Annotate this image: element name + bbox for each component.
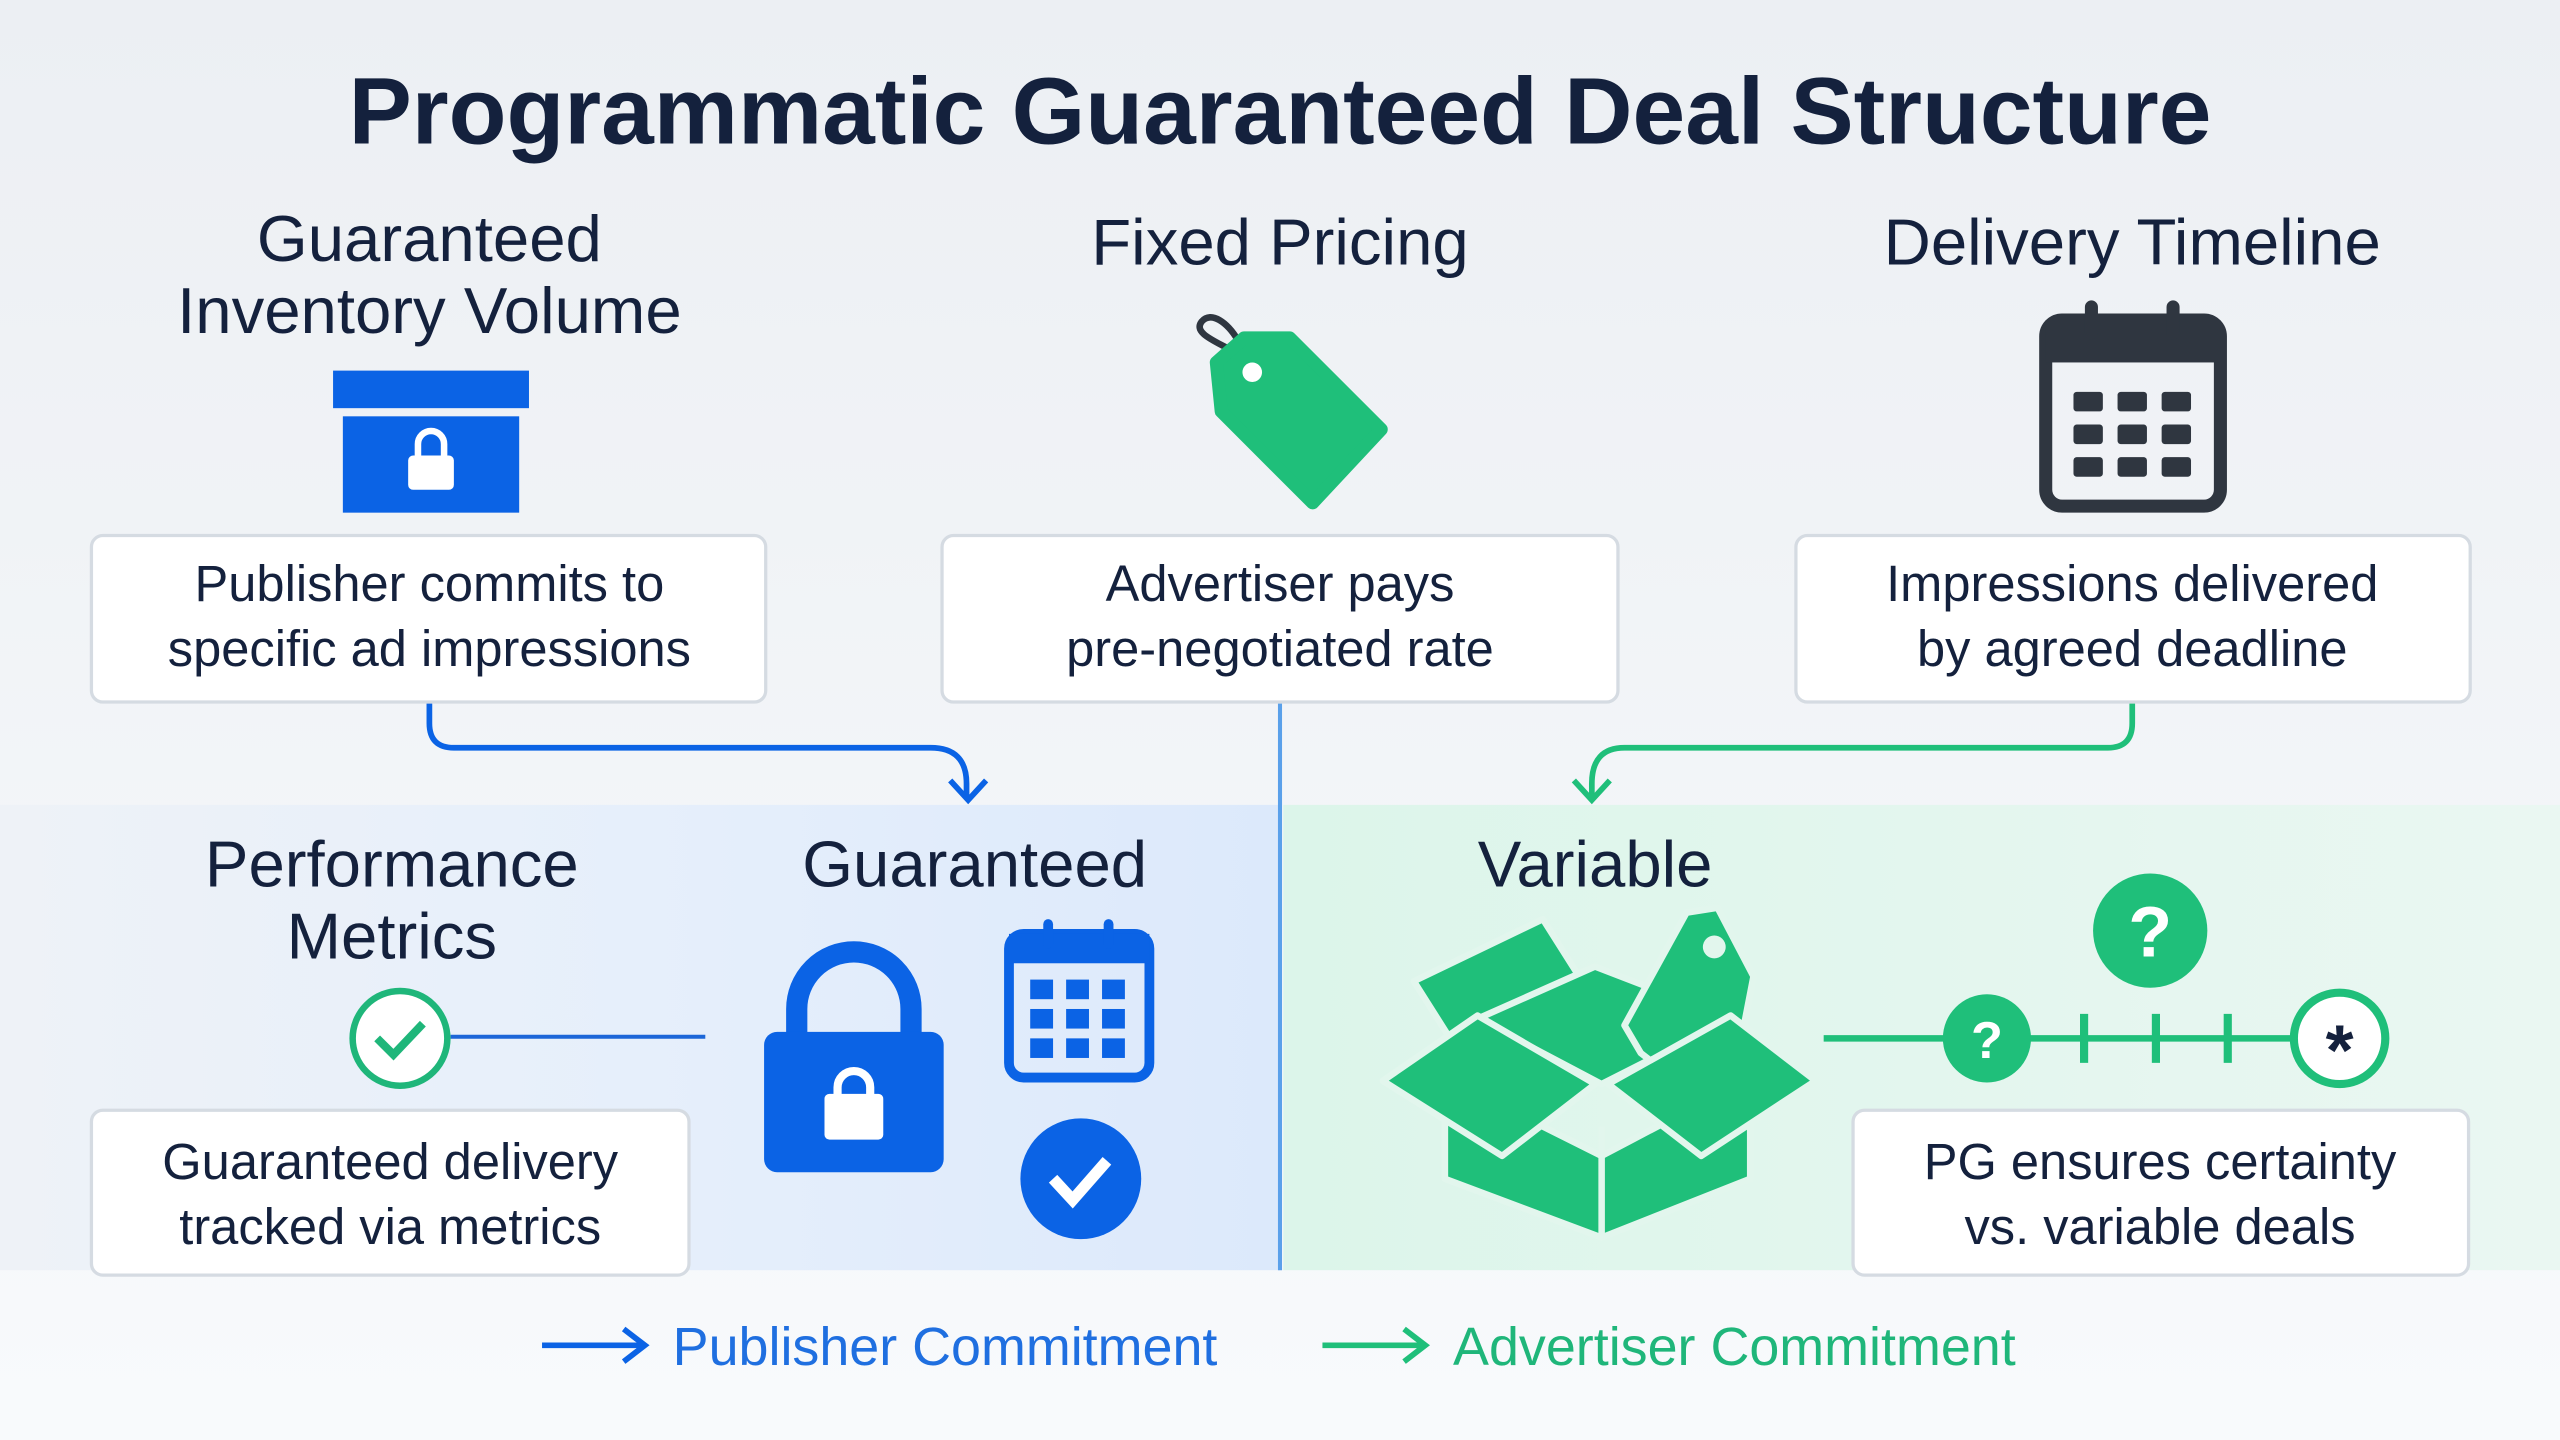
icon: variable timeline: * — [2326, 1010, 2354, 1090]
heading: guaranteed inventory volume: Inventory Volume — [177, 274, 682, 347]
panel: variable background — [1283, 805, 2560, 1270]
icon: blue check circle — [1020, 1118, 1141, 1239]
heading: performance metrics: Performance — [205, 828, 579, 901]
icon: variable timeline: ? — [1971, 1012, 2003, 1070]
icon: variable timeline — [1824, 873, 2385, 1090]
panel: guaranteed background — [0, 805, 1280, 1270]
text box: publisher commits: specific ad impressions — [168, 620, 691, 677]
icon: locked box — [333, 371, 529, 513]
text box: publisher commits: Publisher commits to — [195, 555, 664, 612]
heading: fixed pricing: Fixed Pricing — [1091, 205, 1469, 278]
text box: publisher commits — [91, 536, 766, 702]
text box: impressions delivered — [1796, 536, 2470, 702]
heading: delivery timeline: Delivery Timeline — [1884, 205, 2381, 278]
arrow: advertiser connector — [1574, 704, 2132, 800]
text box: guaranteed delivery — [91, 1110, 689, 1275]
text box: advertiser pays: Advertiser pays — [1106, 555, 1454, 612]
text box: PG ensures certainty: vs. variable deals — [1964, 1198, 2356, 1255]
icon: big padlock — [764, 952, 944, 1172]
text box: PG ensures certainty: PG ensures certainty — [1924, 1133, 2397, 1190]
heading: performance metrics: Metrics — [287, 899, 497, 972]
heading: guaranteed inventory volume: Guaranteed — [257, 202, 602, 275]
icon: check circle metrics — [353, 991, 705, 1086]
text box: guaranteed delivery: Guaranteed delivery — [162, 1133, 619, 1190]
heading: guaranteed: Guaranteed — [802, 828, 1147, 901]
text box: PG ensures certainty — [1853, 1110, 2469, 1275]
text box: advertiser pays — [942, 536, 1618, 702]
text box: guaranteed delivery: tracked via metrics — [179, 1198, 601, 1255]
heading: variable: Variable — [1478, 828, 1712, 901]
text box: impressions delivered: Impressions delivered — [1886, 555, 2378, 612]
icon: calendar dark — [2046, 300, 2220, 506]
divider line center — [1279, 704, 1281, 1270]
icon: blue calendar — [1009, 919, 1149, 1078]
title: Programmatic Guaranteed Deal Structure — [349, 59, 2211, 165]
legend: publisher commitment: Publisher Commitment — [673, 1317, 1217, 1377]
legend: advertiser commitment: Advertiser Commitment — [1453, 1317, 2016, 1377]
icon: price tag — [1200, 317, 1381, 503]
text box: advertiser pays: pre-negotiated rate — [1066, 620, 1494, 677]
text box: impressions delivered: by agreed deadline — [1917, 620, 2348, 677]
arrow: publisher connector — [429, 704, 986, 800]
icon: open box with tag — [1383, 908, 1816, 1238]
icon: variable timeline: ? — [2128, 893, 2172, 973]
